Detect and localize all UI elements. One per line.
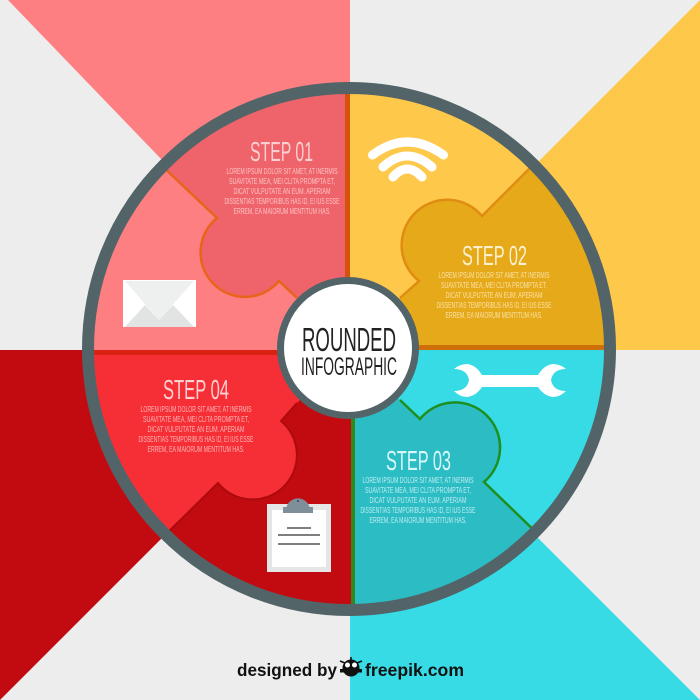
icon: freepik logo <box>340 657 362 676</box>
step 04 text: LOREM IPSUM DOLOR SIT AMET, AT INERMIS <box>140 405 252 414</box>
step 04 text: SUAVITATE MEA, MEI CLITA PROMPTA ET, <box>143 415 249 424</box>
step 03 text <box>360 445 476 525</box>
step 01 text: DISSENTIAS TEMPORIBUS HAS ID, EI IUS ESSE <box>224 197 340 206</box>
puzzle edge: step 03 <box>399 399 532 528</box>
step 02 text: STEP 02 <box>462 240 527 271</box>
step 01 text: LOREM IPSUM DOLOR SIT AMET, AT INERMIS <box>226 167 338 176</box>
step 02 text: ERREM, EA MAIORUM MENTITUM HAS. <box>446 311 542 320</box>
divider: step 04 <box>90 350 285 355</box>
puzzle piece: step 02 <box>399 170 604 345</box>
step 04 text: STEP 04 <box>163 374 229 405</box>
step 01 text: STEP 01 <box>250 136 313 167</box>
divider: step 01 <box>345 90 350 290</box>
puzzle piece: step 01 <box>168 94 345 298</box>
step 04 text <box>138 374 254 454</box>
step 04 text: DISSENTIAS TEMPORIBUS HAS ID, EI IUS ESSE <box>138 435 254 444</box>
step 02 text: DICAT VULPUTATE AN EUM. APERIAM <box>446 291 543 300</box>
step 01 text <box>224 136 340 216</box>
center title: ROUNDED <box>302 321 396 358</box>
quadrant base: red <box>94 355 300 530</box>
divider: step 03 <box>351 410 355 610</box>
step 02 text: LOREM IPSUM DOLOR SIT AMET, AT INERMIS <box>438 271 550 280</box>
quadrant base: pink <box>94 172 296 350</box>
step 01 text: SUAVITATE MEA, MEI CLITA PROMPTA ET, <box>229 177 335 186</box>
puzzle edge: step 04 <box>169 402 298 531</box>
icon: wrench <box>454 364 566 397</box>
step 03 text: SUAVITATE MEA, MEI CLITA PROMPTA ET, <box>365 486 471 495</box>
step 03 text: DICAT VULPUTATE AN EUM. APERIAM <box>370 496 467 505</box>
puzzle piece: step 04 <box>170 400 351 604</box>
background triangle: pink <box>8 0 350 350</box>
footer credit <box>237 657 464 680</box>
puzzle edge: step 01 <box>160 164 297 298</box>
quadrant base: yellow <box>350 94 528 299</box>
center circle <box>280 280 416 416</box>
icon: clipboard <box>267 498 331 572</box>
icon: envelope <box>123 280 196 327</box>
step 02 text <box>436 240 552 320</box>
quadrant base: cyan <box>398 350 604 526</box>
divider: step 02 <box>410 345 610 350</box>
footer credit: designed by <box>237 660 337 680</box>
step 02 text: SUAVITATE MEA, MEI CLITA PROMPTA ET, <box>441 281 547 290</box>
step 03 text: ERREM, EA MAIORUM MENTITUM HAS. <box>370 516 466 525</box>
step 01 text: DICAT VULPUTATE AN EUM. APERIAM <box>234 187 331 196</box>
step 04 text: ERREM, EA MAIORUM MENTITUM HAS. <box>148 445 244 454</box>
background triangle: red <box>0 350 350 700</box>
icon: wifi <box>372 142 444 177</box>
circular puzzle <box>94 94 604 604</box>
step 03 text: DISSENTIAS TEMPORIBUS HAS ID, EI IUS ESSE <box>360 506 476 515</box>
step 03 text: LOREM IPSUM DOLOR SIT AMET, AT INERMIS <box>362 476 474 485</box>
outer ring <box>88 88 610 610</box>
step 01 text: ERREM, EA MAIORUM MENTITUM HAS. <box>234 207 330 216</box>
center title: INFOGRAPHIC <box>301 353 397 381</box>
puzzle edge: step 02 <box>400 160 538 298</box>
background triangle: yellow <box>350 0 700 350</box>
puzzle piece: step 03 <box>355 398 530 604</box>
background triangle: cyan <box>350 350 700 700</box>
center title <box>301 321 397 381</box>
step 04 text: DICAT VULPUTATE AN EUM. APERIAM <box>148 425 245 434</box>
footer credit: freepik.com <box>365 660 464 680</box>
step 03 text: STEP 03 <box>386 445 451 476</box>
step 02 text: DISSENTIAS TEMPORIBUS HAS ID, EI IUS ESSE <box>436 301 552 310</box>
